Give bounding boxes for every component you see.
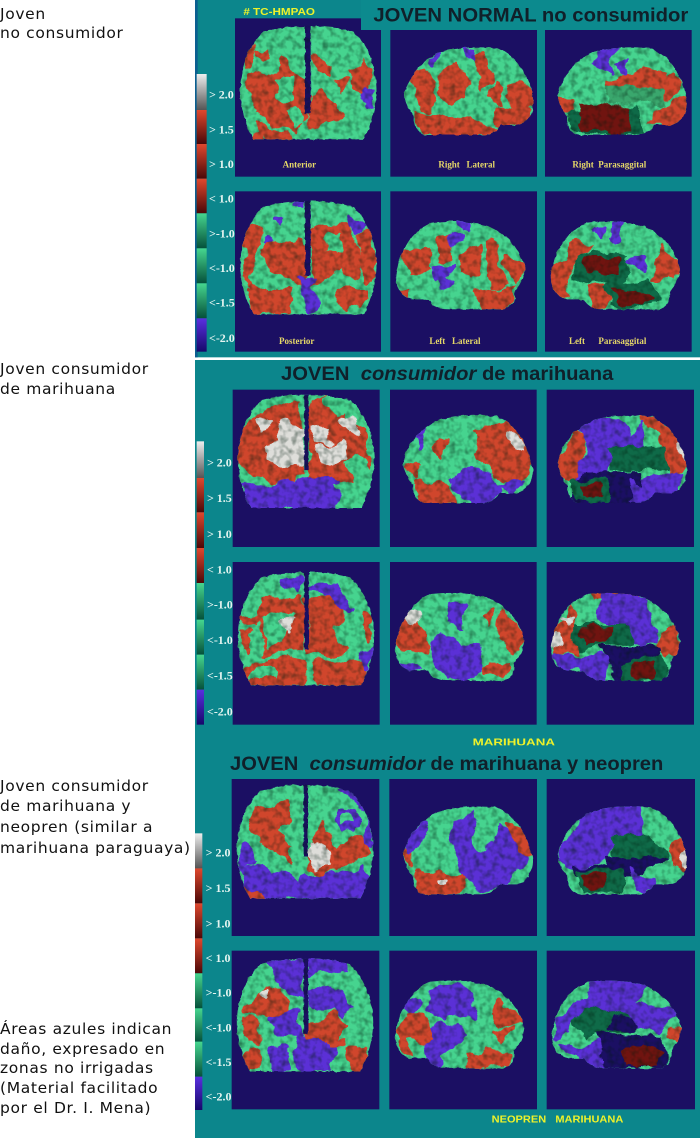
colour scale (197, 74, 235, 352)
colour scale: > 1.0 (209, 157, 234, 171)
colour scale: < 1.0 (206, 951, 230, 965)
colour scale (195, 833, 231, 1110)
view: left parasagittal (547, 951, 695, 1109)
caption: areas azules: daño, expresado en (0, 1040, 165, 1058)
view: left parasagittal (545, 191, 692, 352)
colour scale: >-1.0 (207, 598, 233, 612)
view: left lateral (390, 562, 537, 725)
caption: joven no consumidor: no consumidor (0, 24, 124, 42)
label: marihuana: MARIHUANA (473, 737, 556, 748)
title bar: JOVEN NORMAL no consumidor (373, 6, 689, 27)
view: right parasagittal: Right Parasaggital (572, 160, 647, 170)
view: left lateral (390, 191, 537, 352)
colour scale: > 1.5 (207, 491, 232, 505)
caption: joven consumidor de marihuana y neopren: neopren (similar a (0, 818, 153, 836)
view: left parasagittal (547, 562, 694, 725)
colour scale: < 1.0 (209, 192, 234, 206)
view: posterior: Posterior (279, 336, 314, 346)
caption: joven consumidor de marihuana: Joven consumidor (0, 360, 149, 378)
caption: areas azules: por el Dr. I. Mena) (0, 1099, 151, 1117)
colour scale: > 2.0 (206, 846, 230, 860)
caption: joven no consumidor: Joven (0, 5, 46, 23)
colour scale: <-1.0 (207, 633, 233, 647)
colour scale: > 1.0 (207, 527, 232, 541)
colour scale: < 1.0 (207, 562, 232, 576)
panel: joven normal no consumidor (195, 0, 700, 357)
view: posterior (232, 951, 379, 1109)
colour scale (197, 441, 233, 725)
colour scale: <-1.5 (207, 668, 233, 682)
view: right lateral (389, 779, 537, 936)
colour scale: <-1.0 (206, 1020, 231, 1034)
colour scale: > 1.5 (209, 122, 234, 136)
caption: areas azules: Áreas azules indican (0, 1019, 172, 1038)
colour scale: > 1.0 (206, 916, 230, 930)
view: anterior (235, 18, 381, 177)
colour scale: <-1.5 (206, 1055, 231, 1069)
view: right lateral (390, 390, 537, 547)
view: posterior (233, 562, 380, 725)
view: right parasagittal (547, 390, 694, 547)
view: right parasagittal (545, 18, 692, 177)
colour scale: <-2.0 (206, 1090, 231, 1104)
colour scale: <-2.0 (207, 704, 233, 718)
view: right parasagittal (547, 779, 695, 936)
caption: joven consumidor de marihuana y neopren: de marihuana y (0, 797, 131, 815)
caption: areas azules: zonas no irrigadas (0, 1059, 154, 1077)
colour scale: > 2.0 (207, 456, 232, 470)
header bar: TC-HMPAO: # TC-HMPAO (243, 7, 315, 18)
panel: joven consumidor de marihuana y neopren (195, 745, 700, 1138)
view: right lateral: Right Lateral (438, 160, 495, 170)
title: JOVEN consumidor de marihuana y neopren (230, 754, 663, 775)
colour scale: <-1.0 (209, 261, 235, 275)
colour scale: > 1.5 (206, 881, 230, 895)
caption: areas azules: (Material facilitado (0, 1079, 158, 1097)
colour scale: >-1.0 (209, 226, 235, 240)
colour scale: > 2.0 (209, 88, 234, 102)
view: right lateral (390, 18, 537, 177)
title bar (361, 0, 700, 30)
title: JOVEN consumidor de marihuana (281, 364, 614, 385)
colour scale: <-2.0 (209, 331, 235, 345)
view: anterior (233, 390, 380, 547)
view: anterior: Anterior (283, 160, 316, 170)
view: left parasagittal: Left Parasaggital (569, 336, 647, 346)
view: left lateral (389, 951, 537, 1109)
caption: joven consumidor de marihuana: de marihuana (0, 380, 116, 398)
colour scale: <-1.5 (209, 296, 235, 310)
caption: joven consumidor de marihuana y neopren: marihuana paraguaya) (0, 839, 191, 857)
label: neopren marihuana: NEOPREN MARIHUANA (492, 1115, 624, 1126)
caption: joven consumidor de marihuana y neopren: Joven consumidor (0, 777, 149, 795)
view: anterior (232, 779, 379, 936)
view: left lateral: Left Lateral (429, 336, 481, 346)
panel: joven consumidor de marihuana (195, 358, 700, 751)
colour scale: >-1.0 (206, 986, 231, 1000)
view: posterior (235, 191, 381, 352)
